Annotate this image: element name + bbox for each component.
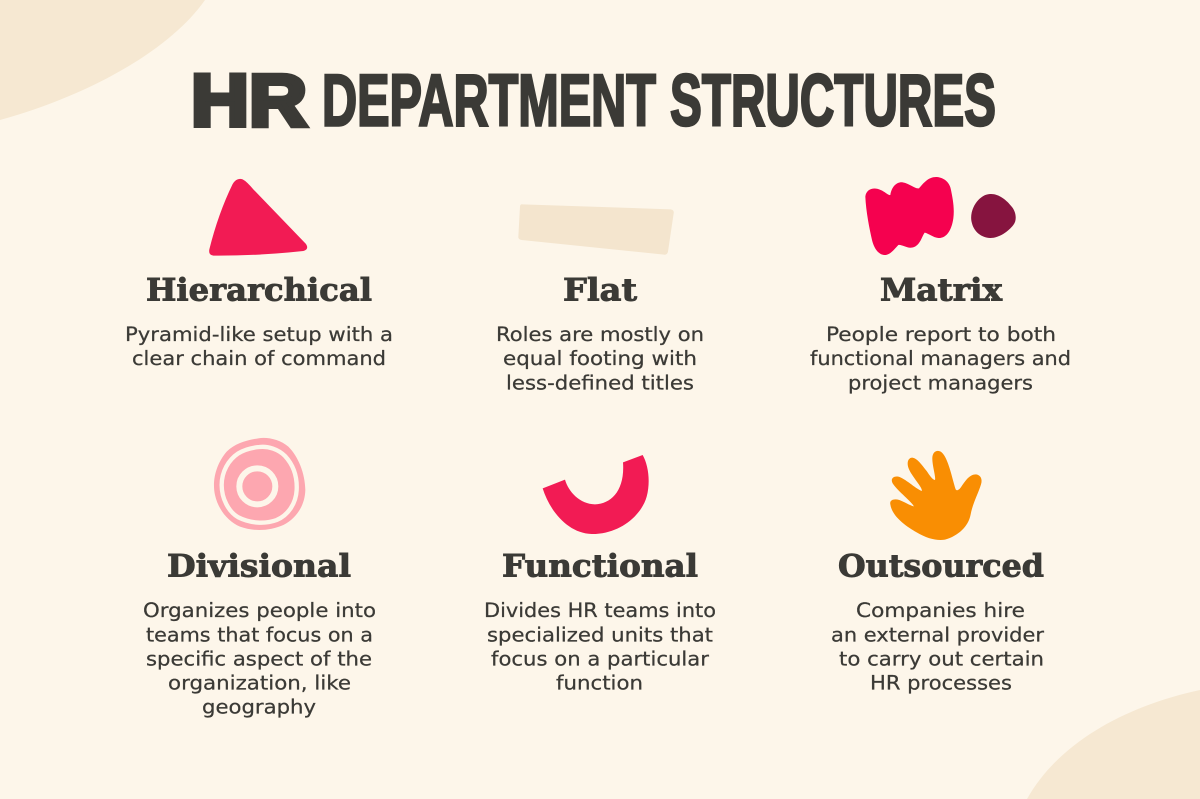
corner blob: bottom right (1027, 690, 1200, 799)
title: DEPARTMENT (322, 60, 656, 142)
text: divisional description: organization, like (168, 672, 351, 694)
icon: red arc (543, 455, 649, 534)
text: outsourced description (831, 599, 1045, 694)
heading: divisional: Divisional (167, 548, 351, 584)
icon: red triangle (209, 179, 307, 256)
text: divisional description: Organizes people into (143, 599, 376, 622)
title: STRUCTURES (670, 60, 996, 142)
icon: orange hand (890, 451, 982, 540)
heading: matrix: Matrix (880, 272, 1003, 308)
text: flat description (496, 323, 704, 394)
heading: flat: Flat (563, 272, 638, 308)
heading: functional: Functional (502, 548, 698, 584)
corner blob: top left (0, 0, 205, 120)
text: divisional description: specific aspect of the (146, 648, 372, 670)
icon: blob and dot (865, 177, 1016, 255)
panel: flat (496, 204, 704, 394)
text: outsourced description: Companies hire (856, 599, 1025, 622)
text: matrix description: functional managers and (810, 347, 1071, 370)
panel: outsourced (831, 451, 1045, 694)
text: functional description: Divides HR teams into (484, 599, 716, 622)
text: flat description: less-defined titles (506, 372, 694, 394)
text: matrix description: project managers (848, 372, 1033, 394)
title: HR (191, 60, 307, 142)
panel: hierarchical (125, 179, 393, 370)
text: flat description: equal footing with (503, 347, 697, 370)
panel: divisional (143, 438, 376, 718)
title (191, 60, 996, 142)
text: functional description: function (556, 672, 643, 694)
heading: outsourced: Outsourced (838, 548, 1044, 584)
text: divisional description: teams that focus on a (146, 624, 373, 646)
text: divisional description: geography (202, 696, 316, 718)
heading: hierarchical: Hierarchical (146, 272, 372, 308)
text: hierarchical description: Pyramid-like setup with a (125, 323, 393, 346)
text: functional description: focus on a particular (491, 648, 710, 670)
text: flat description: Roles are mostly on (496, 323, 704, 346)
icon: beige bar (518, 204, 674, 255)
text: matrix description: People report to both (826, 323, 1056, 346)
panel: matrix (810, 177, 1071, 394)
text: divisional description (143, 599, 376, 718)
text: outsourced description: to carry out certain (839, 648, 1044, 670)
text: outsourced description: an external provider (831, 624, 1045, 646)
text: hierarchical description: clear chain of command (132, 347, 386, 370)
icon: pink concentric circles (214, 438, 305, 530)
text: functional description: specialized units that (487, 624, 713, 646)
text: hierarchical description (125, 323, 393, 370)
text: functional description (484, 599, 716, 694)
panel: functional (484, 455, 716, 694)
text: matrix description (810, 323, 1071, 394)
text: outsourced description: HR processes (870, 672, 1012, 694)
